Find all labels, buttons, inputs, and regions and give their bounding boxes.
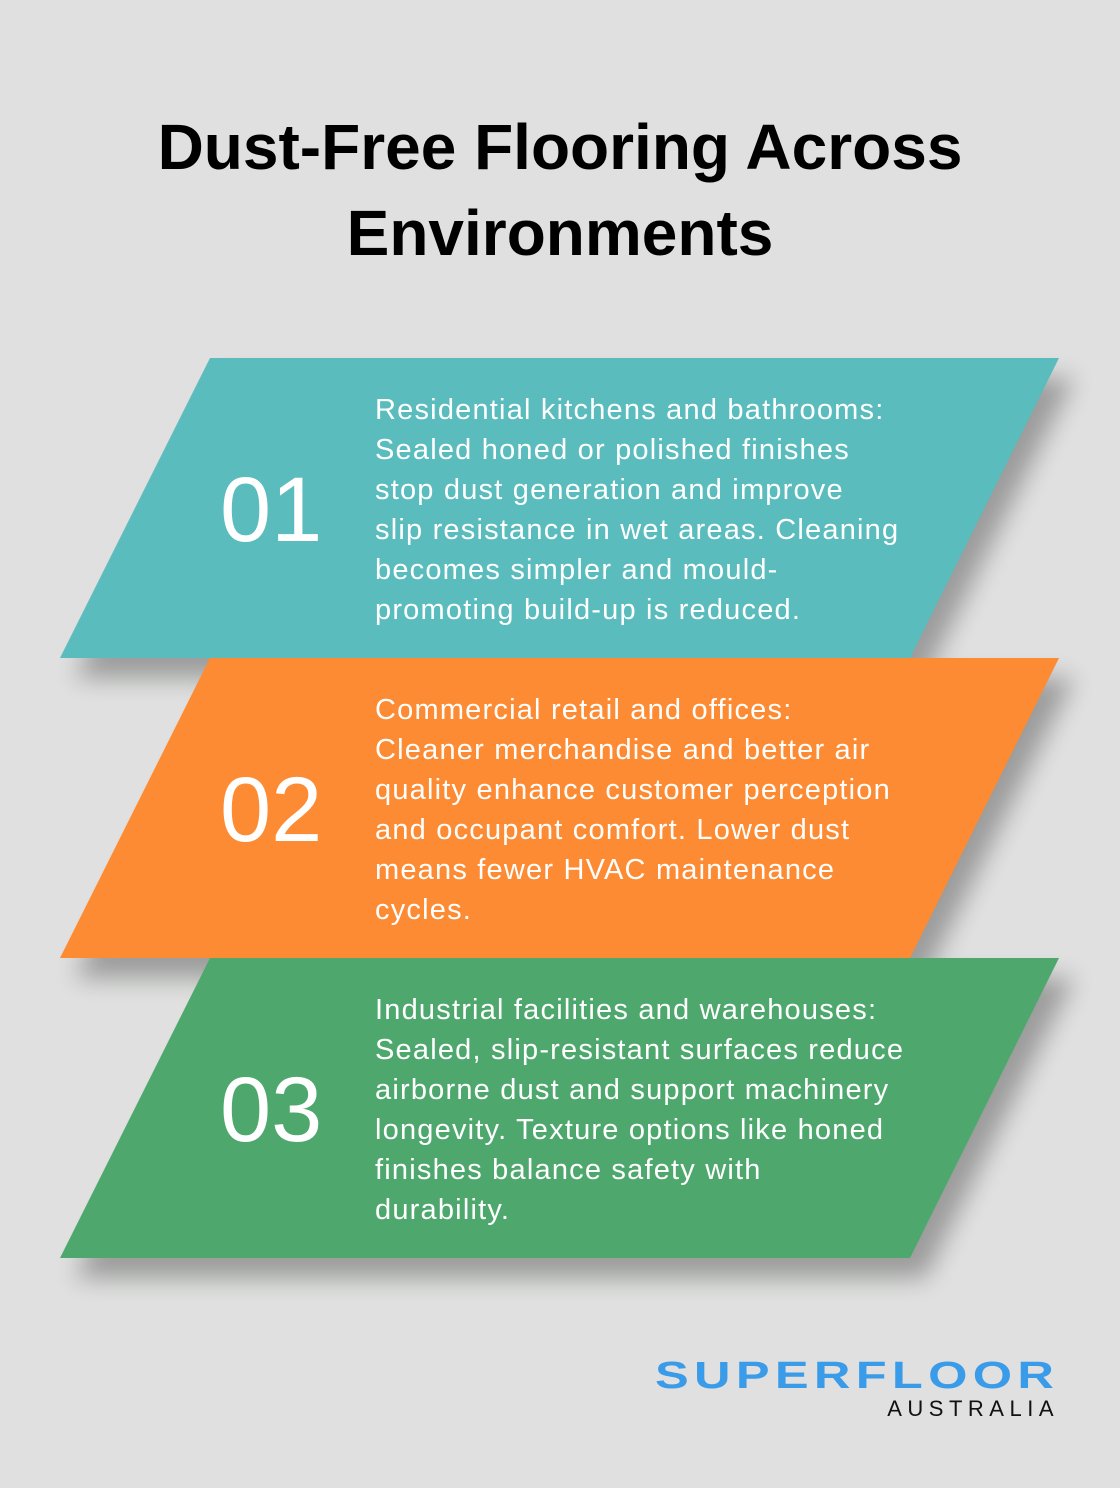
text 02: means fewer HVAC maintenance [375, 854, 835, 886]
title [158, 111, 962, 269]
text 03: airborne dust and support machinery [375, 1074, 889, 1106]
text 03: Sealed, slip-resistant surfaces reduce [375, 1034, 904, 1066]
number 02: 02 [220, 759, 322, 861]
logo: AUSTRALIA [887, 1396, 1059, 1421]
text 03: durability. [375, 1194, 510, 1226]
text 01 [375, 394, 899, 626]
text 02: quality enhance customer perception [375, 774, 891, 806]
text 01: becomes simpler and mould- [375, 554, 779, 586]
text 02: Cleaner merchandise and better air [375, 734, 870, 766]
text 01: Residential kitchens and bathrooms: [375, 394, 884, 426]
number 03: 03 [220, 1059, 322, 1161]
title: Dust-Free Flooring Across [158, 111, 962, 183]
text 01: stop dust generation and improve [375, 474, 844, 506]
text 03 [375, 994, 904, 1226]
band 2 [60, 658, 1059, 958]
text 01: slip resistance in wet areas. Cleaning [375, 514, 899, 546]
band 3 [60, 958, 1059, 1258]
logo [655, 1355, 1059, 1421]
logo: SUPERFLOOR [655, 1355, 1059, 1397]
text 03: longevity. Texture options like honed [375, 1114, 884, 1146]
band 1 [60, 358, 1059, 658]
title: Environments [347, 197, 773, 269]
text 01: promoting build-up is reduced. [375, 594, 801, 626]
text 03: finishes balance safety with [375, 1154, 762, 1186]
text 01: Sealed honed or polished finishes [375, 434, 850, 466]
text 02: Commercial retail and offices: [375, 694, 792, 726]
text 02 [375, 694, 891, 926]
text 02: cycles. [375, 894, 472, 926]
number 01: 01 [220, 459, 322, 561]
text 02: and occupant comfort. Lower dust [375, 814, 850, 846]
text 03: Industrial facilities and warehouses: [375, 994, 877, 1026]
